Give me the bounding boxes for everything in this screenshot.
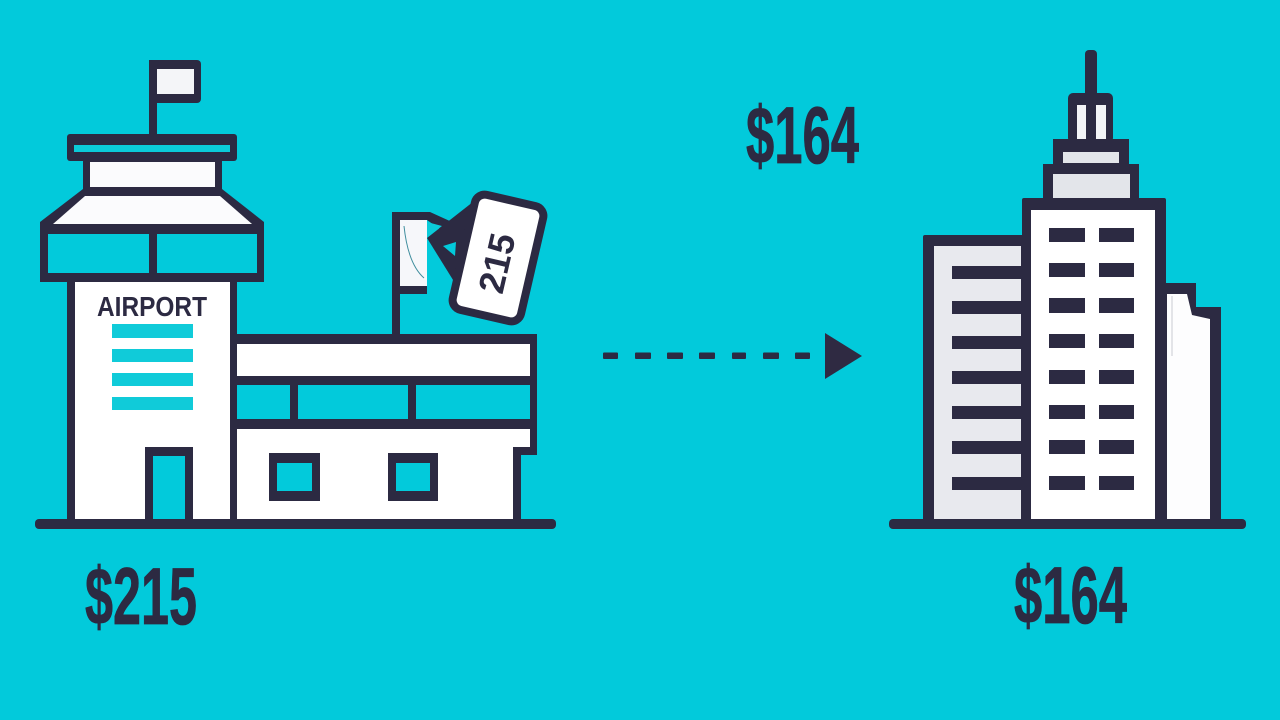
tag value: 215 — [470, 229, 524, 297]
control tower top — [40, 134, 264, 282]
terminal window right — [388, 453, 438, 501]
ground line — [889, 519, 1246, 529]
tower body — [67, 282, 237, 522]
label: AIRPORT: AIRPORT — [97, 291, 207, 322]
tower stripes — [112, 324, 193, 410]
arrow: dashed, airport to city — [603, 333, 862, 379]
price label: $215: $215 — [85, 552, 197, 642]
icon: tower flag — [149, 60, 201, 136]
left building — [923, 235, 1028, 522]
main tower windows — [1049, 228, 1134, 490]
price label: $164 bottom: $164 — [1014, 551, 1127, 641]
terminal building — [237, 334, 537, 522]
ground line — [35, 519, 556, 529]
icon: roof flag — [392, 212, 452, 335]
left building stripes — [952, 266, 1022, 490]
airport illustration — [35, 60, 556, 529]
main tower — [1022, 198, 1166, 522]
right low building — [1160, 283, 1221, 522]
tower door — [145, 447, 193, 520]
price label: $164 top: $164 — [746, 91, 859, 181]
city skyscraper illustration — [889, 50, 1246, 529]
spire and tiers — [1043, 50, 1139, 202]
terminal window left — [269, 453, 320, 501]
price tag: 215 — [427, 193, 545, 323]
